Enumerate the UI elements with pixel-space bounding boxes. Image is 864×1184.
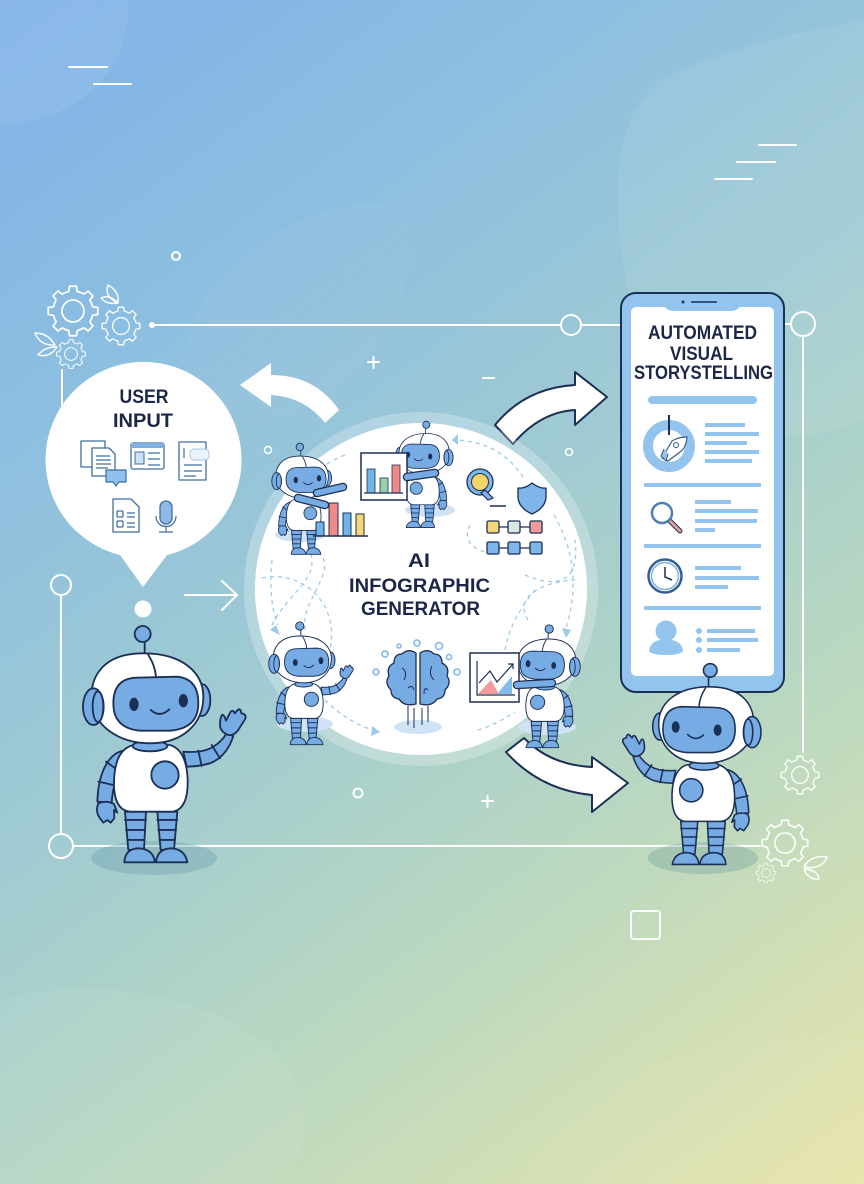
heading: user input <box>113 386 173 432</box>
heading: AI infographic generator: AI <box>408 550 430 572</box>
heading: user input: USER <box>120 386 168 408</box>
bar chart <box>313 503 368 536</box>
dashed flow paths <box>262 434 576 736</box>
decorative dashes: top right <box>715 145 796 179</box>
flow diagram <box>487 506 542 554</box>
icon: document with comment <box>179 442 209 480</box>
robot: large right waving <box>623 664 761 874</box>
icon: clock <box>648 560 682 592</box>
icon: documents with chat <box>81 441 126 486</box>
arrow: generator to robot <box>506 738 628 812</box>
heading: automated visual storytelling <box>634 323 773 384</box>
chart board <box>361 453 407 500</box>
small accents <box>172 252 494 807</box>
robot: bottom left waving <box>269 622 353 745</box>
icon: rocket donut <box>648 415 690 467</box>
icon: magnifier <box>652 503 680 531</box>
text lines: rocket <box>705 423 759 463</box>
heading: automated visual storytelling: STORYSTELLING <box>634 363 773 384</box>
title bar <box>648 396 757 404</box>
rounded square accent <box>631 911 660 939</box>
heading: automated visual storytelling: VISUAL <box>670 344 733 365</box>
panel: automated visual storytelling phone <box>621 293 784 692</box>
heading: AI infographic generator <box>349 550 490 620</box>
robot: large left waving <box>83 626 246 875</box>
panel: AI infographic generator circle <box>244 412 598 766</box>
decorative dashes: top left <box>69 67 131 84</box>
heading: AI infographic generator: INFOGRAPHIC <box>349 575 490 597</box>
gears: bottom right <box>756 756 827 883</box>
icon: microphone <box>156 501 176 532</box>
line chart board <box>470 653 519 702</box>
heading: user input: INPUT <box>113 410 173 432</box>
arrow: white return arrow <box>240 363 339 423</box>
robot: top left with bar chart <box>272 443 368 554</box>
text lines: clock <box>695 566 759 589</box>
icon: shield <box>518 483 546 514</box>
text lines: magnifier <box>695 500 758 532</box>
arrow: thin white to generator <box>185 581 237 610</box>
bubble dot <box>134 600 152 618</box>
icon: person <box>649 620 683 655</box>
connector lines <box>49 312 815 858</box>
icon: light bulb <box>467 469 493 500</box>
robot: top presenting chart <box>361 421 455 528</box>
heading: automated visual storytelling: AUTOMATED <box>648 323 757 344</box>
icon: form document <box>113 499 139 532</box>
text lines: person <box>696 628 758 653</box>
heading: AI infographic generator: GENERATOR <box>361 598 480 620</box>
icon: browser profile card <box>131 443 164 469</box>
gears: top left <box>35 285 140 369</box>
icon: brain <box>373 640 460 734</box>
panel: user input speech bubble <box>46 362 242 587</box>
arrow: generator to phone <box>495 372 607 444</box>
robot: bottom right with line chart <box>470 625 580 748</box>
